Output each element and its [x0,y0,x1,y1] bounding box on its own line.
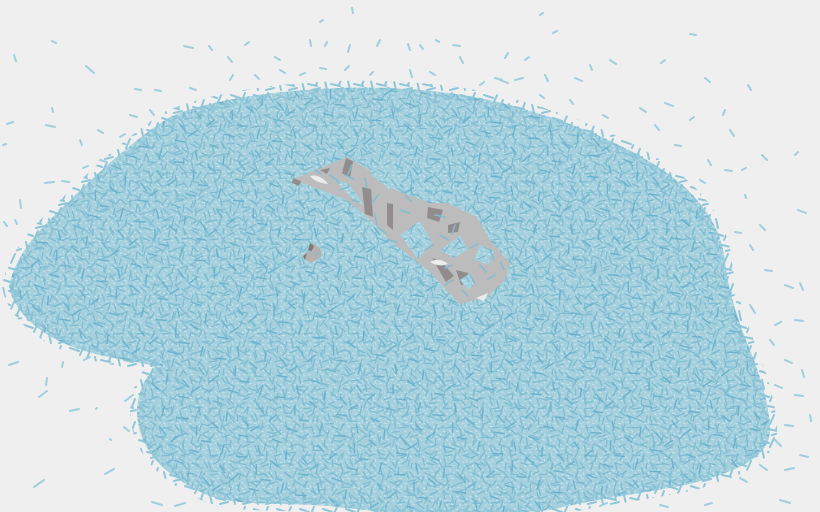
small grey debris fragment [303,243,322,263]
mound of blue rods [9,88,770,512]
exposed grey debris patch [292,148,510,304]
